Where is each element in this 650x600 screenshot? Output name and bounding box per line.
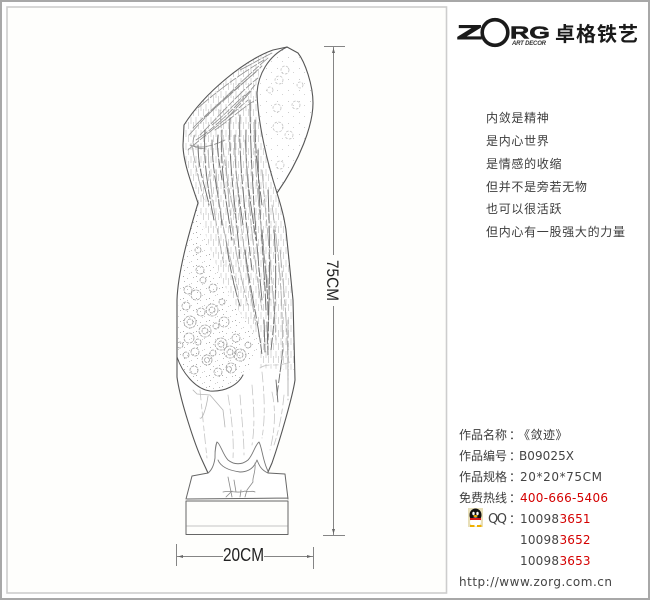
product details: ： <box>509 468 521 485</box>
torso tone hatching <box>183 50 295 370</box>
product details: 免费热线 <box>459 489 507 506</box>
logo chinese name: 卓格铁艺 <box>555 18 638 47</box>
mosaic boundary <box>177 357 243 391</box>
product details: http://www.zorg.com.cn <box>459 575 612 589</box>
cut face edge <box>257 47 287 193</box>
product details: 10098 <box>520 533 559 547</box>
product details: ： <box>509 510 521 527</box>
base block <box>186 501 288 534</box>
width label: 20CM <box>223 545 264 565</box>
poem text: 也可以很活跃 <box>486 200 562 217</box>
flowing vertical hatching dark <box>198 100 283 403</box>
lower left fold <box>193 390 225 452</box>
flowing vertical hatching light <box>192 110 288 400</box>
product details: ： <box>509 489 521 506</box>
poem text: 但内心有一股强大的力量 <box>486 223 626 240</box>
product details: 作品编号 <box>459 447 507 464</box>
product details: 3652 <box>560 533 590 547</box>
sculpture body fill <box>177 47 313 500</box>
product details: 《敛迹》 <box>518 426 568 443</box>
drawing panel <box>7 7 446 593</box>
logo letter Z: Z <box>457 23 483 44</box>
width dimension <box>176 544 314 569</box>
product details: 作品规格 <box>459 468 507 485</box>
mosaic texture <box>177 203 260 391</box>
upper diagonal hatching <box>188 53 272 150</box>
sculpture sketch <box>177 47 313 534</box>
height dimension <box>323 46 345 536</box>
sculpture outline <box>177 47 313 473</box>
scalloped hem <box>208 442 268 473</box>
poem text: 但并不是旁若无物 <box>486 178 588 195</box>
product details: ： <box>509 426 521 443</box>
product details: 400-666-5406 <box>520 491 608 505</box>
product details: 10098 <box>520 554 559 568</box>
logo letters RG: RG <box>510 22 550 42</box>
product details: 10098 <box>520 512 559 526</box>
product details: 20*20*75CM <box>520 470 602 484</box>
brand logo <box>457 18 638 47</box>
poem text: 是情感的收缩 <box>486 155 562 172</box>
lower body faint strokes <box>200 362 290 458</box>
product details: 3653 <box>560 554 590 568</box>
logo tagline: ART DECOR <box>511 41 547 47</box>
product details: QQ <box>488 512 507 527</box>
poem text: 内敛是精神 <box>486 109 550 126</box>
poem text <box>486 109 626 240</box>
icon: QQ penguin <box>468 508 483 527</box>
product details: 3651 <box>560 512 590 526</box>
logo ring O <box>482 20 508 45</box>
poem text: 是内心世界 <box>486 132 550 149</box>
cut face texture <box>257 47 313 193</box>
product details: B09025X <box>519 449 574 463</box>
sculpture feet <box>223 463 255 497</box>
product details: 作品名称 <box>459 426 507 443</box>
product details <box>459 426 612 589</box>
base plinth top <box>186 473 288 499</box>
product details: ： <box>509 447 521 464</box>
height label: 75CM <box>323 260 342 301</box>
